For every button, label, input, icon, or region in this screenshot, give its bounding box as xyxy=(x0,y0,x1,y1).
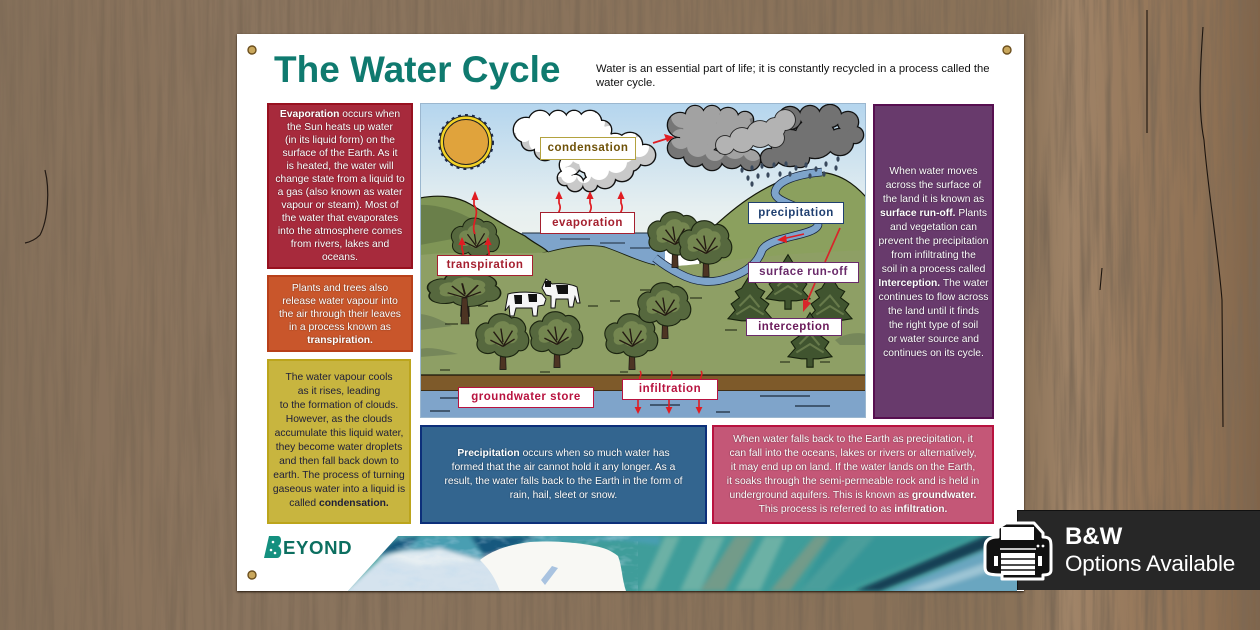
soil xyxy=(420,375,866,391)
panel: groundwater: When water falls back to the Earth as precipitation, it xyxy=(733,434,973,445)
panel: condensation: called condensation. xyxy=(289,498,389,509)
panel: evaporation: the water that evaporates xyxy=(282,213,398,224)
panel: condensation: earth. The process of turning xyxy=(273,470,405,481)
label: groundwater store: groundwater store xyxy=(471,391,581,403)
panel: groundwater: it may end up on land. If the water lands on the Earth, xyxy=(731,462,975,473)
panel: surface run-off: the right type of soil xyxy=(889,320,978,331)
panel: groundwater: it soaks through the semi-permeable rock and is held in xyxy=(727,476,979,487)
panel: transpiration: in a process known as xyxy=(289,322,391,332)
label: transpiration xyxy=(437,255,533,276)
panel: groundwater: This process is referred to as infiltration. xyxy=(759,504,947,515)
label: evaporation: evaporation xyxy=(552,217,623,229)
panel: evaporation: oceans. xyxy=(322,252,358,263)
label: surface run-off xyxy=(748,262,859,283)
panel: condensation: and then fall back down to xyxy=(279,456,399,467)
river xyxy=(655,172,822,281)
panel: condensation: to the formation of clouds. xyxy=(280,400,398,411)
diagram: water cycle scene xyxy=(420,103,866,418)
panel: surface run-off xyxy=(873,104,994,419)
panel: precipitation: rain, hail, sleet or snow. xyxy=(510,490,617,501)
left hill xyxy=(421,196,548,255)
panel: transpiration: release water vapour into xyxy=(282,296,398,306)
panel: evaporation: vapour or steam). Most of xyxy=(281,200,399,211)
groundwater xyxy=(420,391,866,418)
right hill xyxy=(699,172,865,264)
panel: evaporation xyxy=(267,103,413,269)
banner: water photo xyxy=(348,536,1017,591)
cows xyxy=(505,279,580,316)
panel: evaporation: into the atmosphere comes xyxy=(278,226,402,237)
panel: surface run-off: surface run-off. Plants xyxy=(880,208,987,219)
panel: surface run-off: and vegetation can xyxy=(890,222,977,233)
panel: surface run-off: the land it is known as xyxy=(883,194,984,205)
panel: precipitation: Precipitation occurs when so much water has xyxy=(457,448,670,459)
panel: surface run-off: across the surface of xyxy=(886,180,981,191)
sun xyxy=(439,115,493,169)
panel: condensation: accumulate this liquid water, xyxy=(275,428,403,439)
panel: precipitation: formed that the air cannot hold it any longer. As a xyxy=(452,462,675,473)
poster xyxy=(237,34,1024,591)
intro text: water cycle. xyxy=(596,77,655,89)
intro text xyxy=(596,62,990,89)
panel: evaporation: from rivers, lakes and xyxy=(291,239,389,250)
panel: groundwater: underground aquifers. This is known as groundwater. xyxy=(729,490,977,501)
panel: surface run-off: from infiltrating the xyxy=(891,250,976,261)
white cloud xyxy=(508,103,655,191)
lake xyxy=(520,233,665,266)
panel: condensation xyxy=(267,359,411,524)
panel: evaporation: change state from a liquid to xyxy=(275,174,405,185)
badge: B&W options xyxy=(1017,510,1260,590)
label: condensation: condensation xyxy=(548,142,628,154)
panel: condensation: as it rises, leading xyxy=(298,386,380,397)
arrows xyxy=(458,134,840,414)
panel: condensation: they become water droplets xyxy=(276,442,402,453)
logo: Beyond: EYOND xyxy=(283,537,352,558)
intro text: Water is an essential part of life; it is constantly recycled in a process called the xyxy=(596,62,990,74)
label: interception xyxy=(746,318,842,336)
sky xyxy=(420,103,866,243)
panel: evaporation: (in its liquid form) on the xyxy=(285,135,395,146)
label: precipitation: precipitation xyxy=(758,207,834,219)
label: groundwater store xyxy=(458,387,594,408)
panel: evaporation: surface of the Earth. As it xyxy=(282,148,398,159)
panel: surface run-off: continues on its cycle. xyxy=(883,348,984,359)
panel: surface run-off: Interception. The water xyxy=(878,278,989,289)
label: infiltration: infiltration xyxy=(639,383,701,395)
label: transpiration: transpiration xyxy=(447,259,523,271)
panel: transpiration: the air through their leaves xyxy=(279,308,401,320)
panel: precipitation xyxy=(420,425,707,524)
panel: precipitation: result, the water falls back to the Earth in the form of xyxy=(444,476,683,487)
label: precipitation xyxy=(748,202,844,224)
panel: surface run-off: continues to flow across xyxy=(879,292,988,303)
panel: transpiration: Plants and trees also xyxy=(292,282,388,294)
ground tufts xyxy=(440,290,830,372)
trees xyxy=(428,212,852,370)
panel: surface run-off: prevent the precipitation xyxy=(879,236,988,247)
rain drops xyxy=(740,156,840,187)
panel: surface run-off: the land until it finds xyxy=(888,306,979,317)
panel: transpiration: transpiration. xyxy=(307,334,373,346)
panel: evaporation: a gas (also known as water xyxy=(278,187,402,198)
panel: evaporation: is heated, the water will xyxy=(286,161,394,172)
panel: condensation: The water vapour cools xyxy=(285,372,393,383)
panel: surface run-off: soil in a process called xyxy=(882,264,985,275)
label: surface run-off: surface run-off xyxy=(759,266,848,278)
panel: groundwater xyxy=(712,425,994,524)
label: evaporation xyxy=(540,212,635,234)
panel: evaporation: the Sun heats up water xyxy=(287,122,393,133)
grey cloud xyxy=(668,97,863,170)
panel: groundwater: can fall into the oceans, lakes or rivers or alternatively, xyxy=(729,448,977,459)
badge: B&W options: Options Available xyxy=(1065,551,1235,576)
panel: surface run-off: When water moves xyxy=(889,166,978,177)
panel: transpiration xyxy=(267,275,413,352)
panel: surface run-off: or water source and xyxy=(888,334,979,345)
title: The Water Cycle xyxy=(274,49,560,90)
panel: evaporation: Evaporation occurs when xyxy=(280,108,400,120)
ground xyxy=(420,246,866,376)
label: interception: interception xyxy=(758,321,830,333)
panel: condensation: gaseous water into a liquid is xyxy=(273,484,405,495)
badge: B&W options: B&W xyxy=(1065,523,1122,550)
label: infiltration xyxy=(622,379,718,400)
panel: condensation: However, as the clouds xyxy=(286,414,392,425)
label: condensation xyxy=(540,137,636,160)
